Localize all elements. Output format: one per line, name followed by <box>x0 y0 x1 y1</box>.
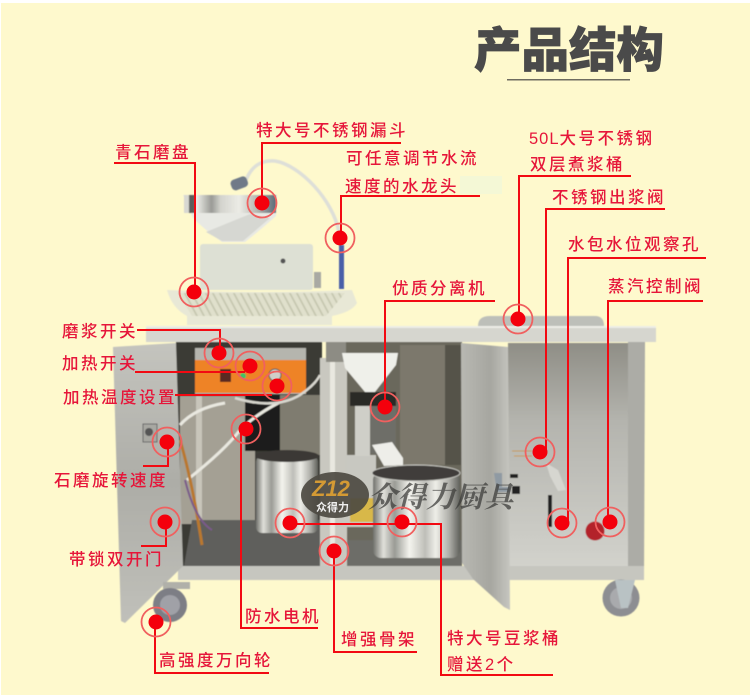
callout: 加热温度设置 <box>63 372 292 407</box>
control box <box>195 348 306 394</box>
cabinet interior left <box>176 342 322 568</box>
faucet pipe <box>339 245 344 289</box>
callout: 特大号豆浆桶赠送2个: 赠送2个 <box>447 655 516 674</box>
left door <box>113 343 183 623</box>
callout: 带锁双开门 <box>69 508 180 569</box>
callout: 水包水位观察孔: 水包水位观察孔 <box>568 234 701 254</box>
callout: 加热开关 <box>62 352 264 380</box>
right post <box>628 342 645 580</box>
cabinet interior right <box>336 342 462 568</box>
callout: 石磨旋转速度 <box>54 428 182 490</box>
callout: 石磨旋转速度: 石磨旋转速度 <box>54 471 168 490</box>
callout: 特大号不锈钢漏斗: 特大号不锈钢漏斗 <box>256 121 408 140</box>
steel funnel <box>183 195 277 242</box>
callout: 不锈钢出浆阀: 不锈钢出浆阀 <box>552 188 666 207</box>
callout: 可任意调节水流速度的水龙头: 可任意调节水流 <box>346 149 479 168</box>
callout: 带锁双开门: 带锁双开门 <box>69 550 164 569</box>
watermark logo: 众得力: Z12 <box>311 476 351 501</box>
callout: 特大号豆浆桶赠送2个 <box>276 508 561 675</box>
callout: 高强度万向轮 <box>142 608 273 673</box>
steam valve <box>586 522 604 540</box>
watermark text: 众得力厨具: 众得力厨具 <box>368 482 518 514</box>
orange marks <box>512 451 532 456</box>
callout: 优质分离机 <box>370 279 495 422</box>
callout: 蒸汽控制阀: 蒸汽控制阀 <box>608 277 703 296</box>
callout: 特大号不锈钢漏斗 <box>248 121 408 218</box>
faint patch behind faucet label <box>460 176 502 194</box>
callout: 50L大号不锈钢双层煮浆桶: 双层煮浆桶 <box>530 155 625 174</box>
title: 产品结构: 产品结构 <box>474 25 664 78</box>
hose <box>246 161 339 232</box>
yellow packing behind logo <box>350 498 374 522</box>
callout: 50L大号不锈钢双层煮浆桶 <box>504 129 655 334</box>
hose nozzle <box>229 175 249 191</box>
centre post <box>320 358 347 568</box>
callout: 磨浆开关: 磨浆开关 <box>62 322 138 341</box>
callout: 特大号豆浆桶赠送2个: 特大号豆浆桶 <box>447 629 561 648</box>
wiring <box>180 375 320 545</box>
callout: 加热开关: 加热开关 <box>62 354 138 373</box>
separator machine <box>342 353 403 527</box>
right pot <box>372 465 460 558</box>
callout: 增强骨架 <box>320 536 417 652</box>
callout: 防水电机: 防水电机 <box>245 607 321 626</box>
callout: 优质分离机: 优质分离机 <box>392 279 487 298</box>
watermark logo: 众得力: 众得力 <box>316 500 349 514</box>
right door lock <box>494 473 520 494</box>
sight glass <box>548 495 552 527</box>
callout: 不锈钢出浆阀 <box>526 188 666 466</box>
watermark logo: 众得力 <box>301 472 369 518</box>
left pot <box>255 450 319 533</box>
right door <box>461 343 510 610</box>
tap <box>546 463 566 491</box>
callout: 加热温度设置: 加热温度设置 <box>63 388 177 407</box>
callout: 50L大号不锈钢双层煮浆桶: 50L大号不锈钢 <box>529 129 655 148</box>
bottom rail <box>178 566 644 580</box>
upper millstone <box>200 244 313 290</box>
machine photo: stone mill and cabinet <box>113 161 656 623</box>
callout: 蒸汽控制阀 <box>596 277 703 536</box>
callout: 高强度万向轮: 高强度万向轮 <box>159 651 273 670</box>
callout: 防水电机 <box>232 414 321 628</box>
callout: 青石磨盘 <box>114 143 208 306</box>
callout: 可任意调节水流速度的水龙头: 速度的水龙头 <box>345 177 459 196</box>
callout: 磨浆开关 <box>62 322 234 368</box>
lower millstone <box>167 290 357 325</box>
door latch <box>143 424 157 442</box>
callout: 青石磨盘: 青石磨盘 <box>115 143 191 162</box>
left caster <box>153 582 190 622</box>
right panel <box>508 343 628 566</box>
callout: 增强骨架: 增强骨架 <box>341 630 417 649</box>
right caster <box>602 580 640 616</box>
cabinet top slab <box>146 326 656 342</box>
callout: 可任意调节水流速度的水龙头 <box>326 149 480 252</box>
boiler lid <box>478 316 604 326</box>
callout: 水包水位观察孔 <box>548 234 706 538</box>
